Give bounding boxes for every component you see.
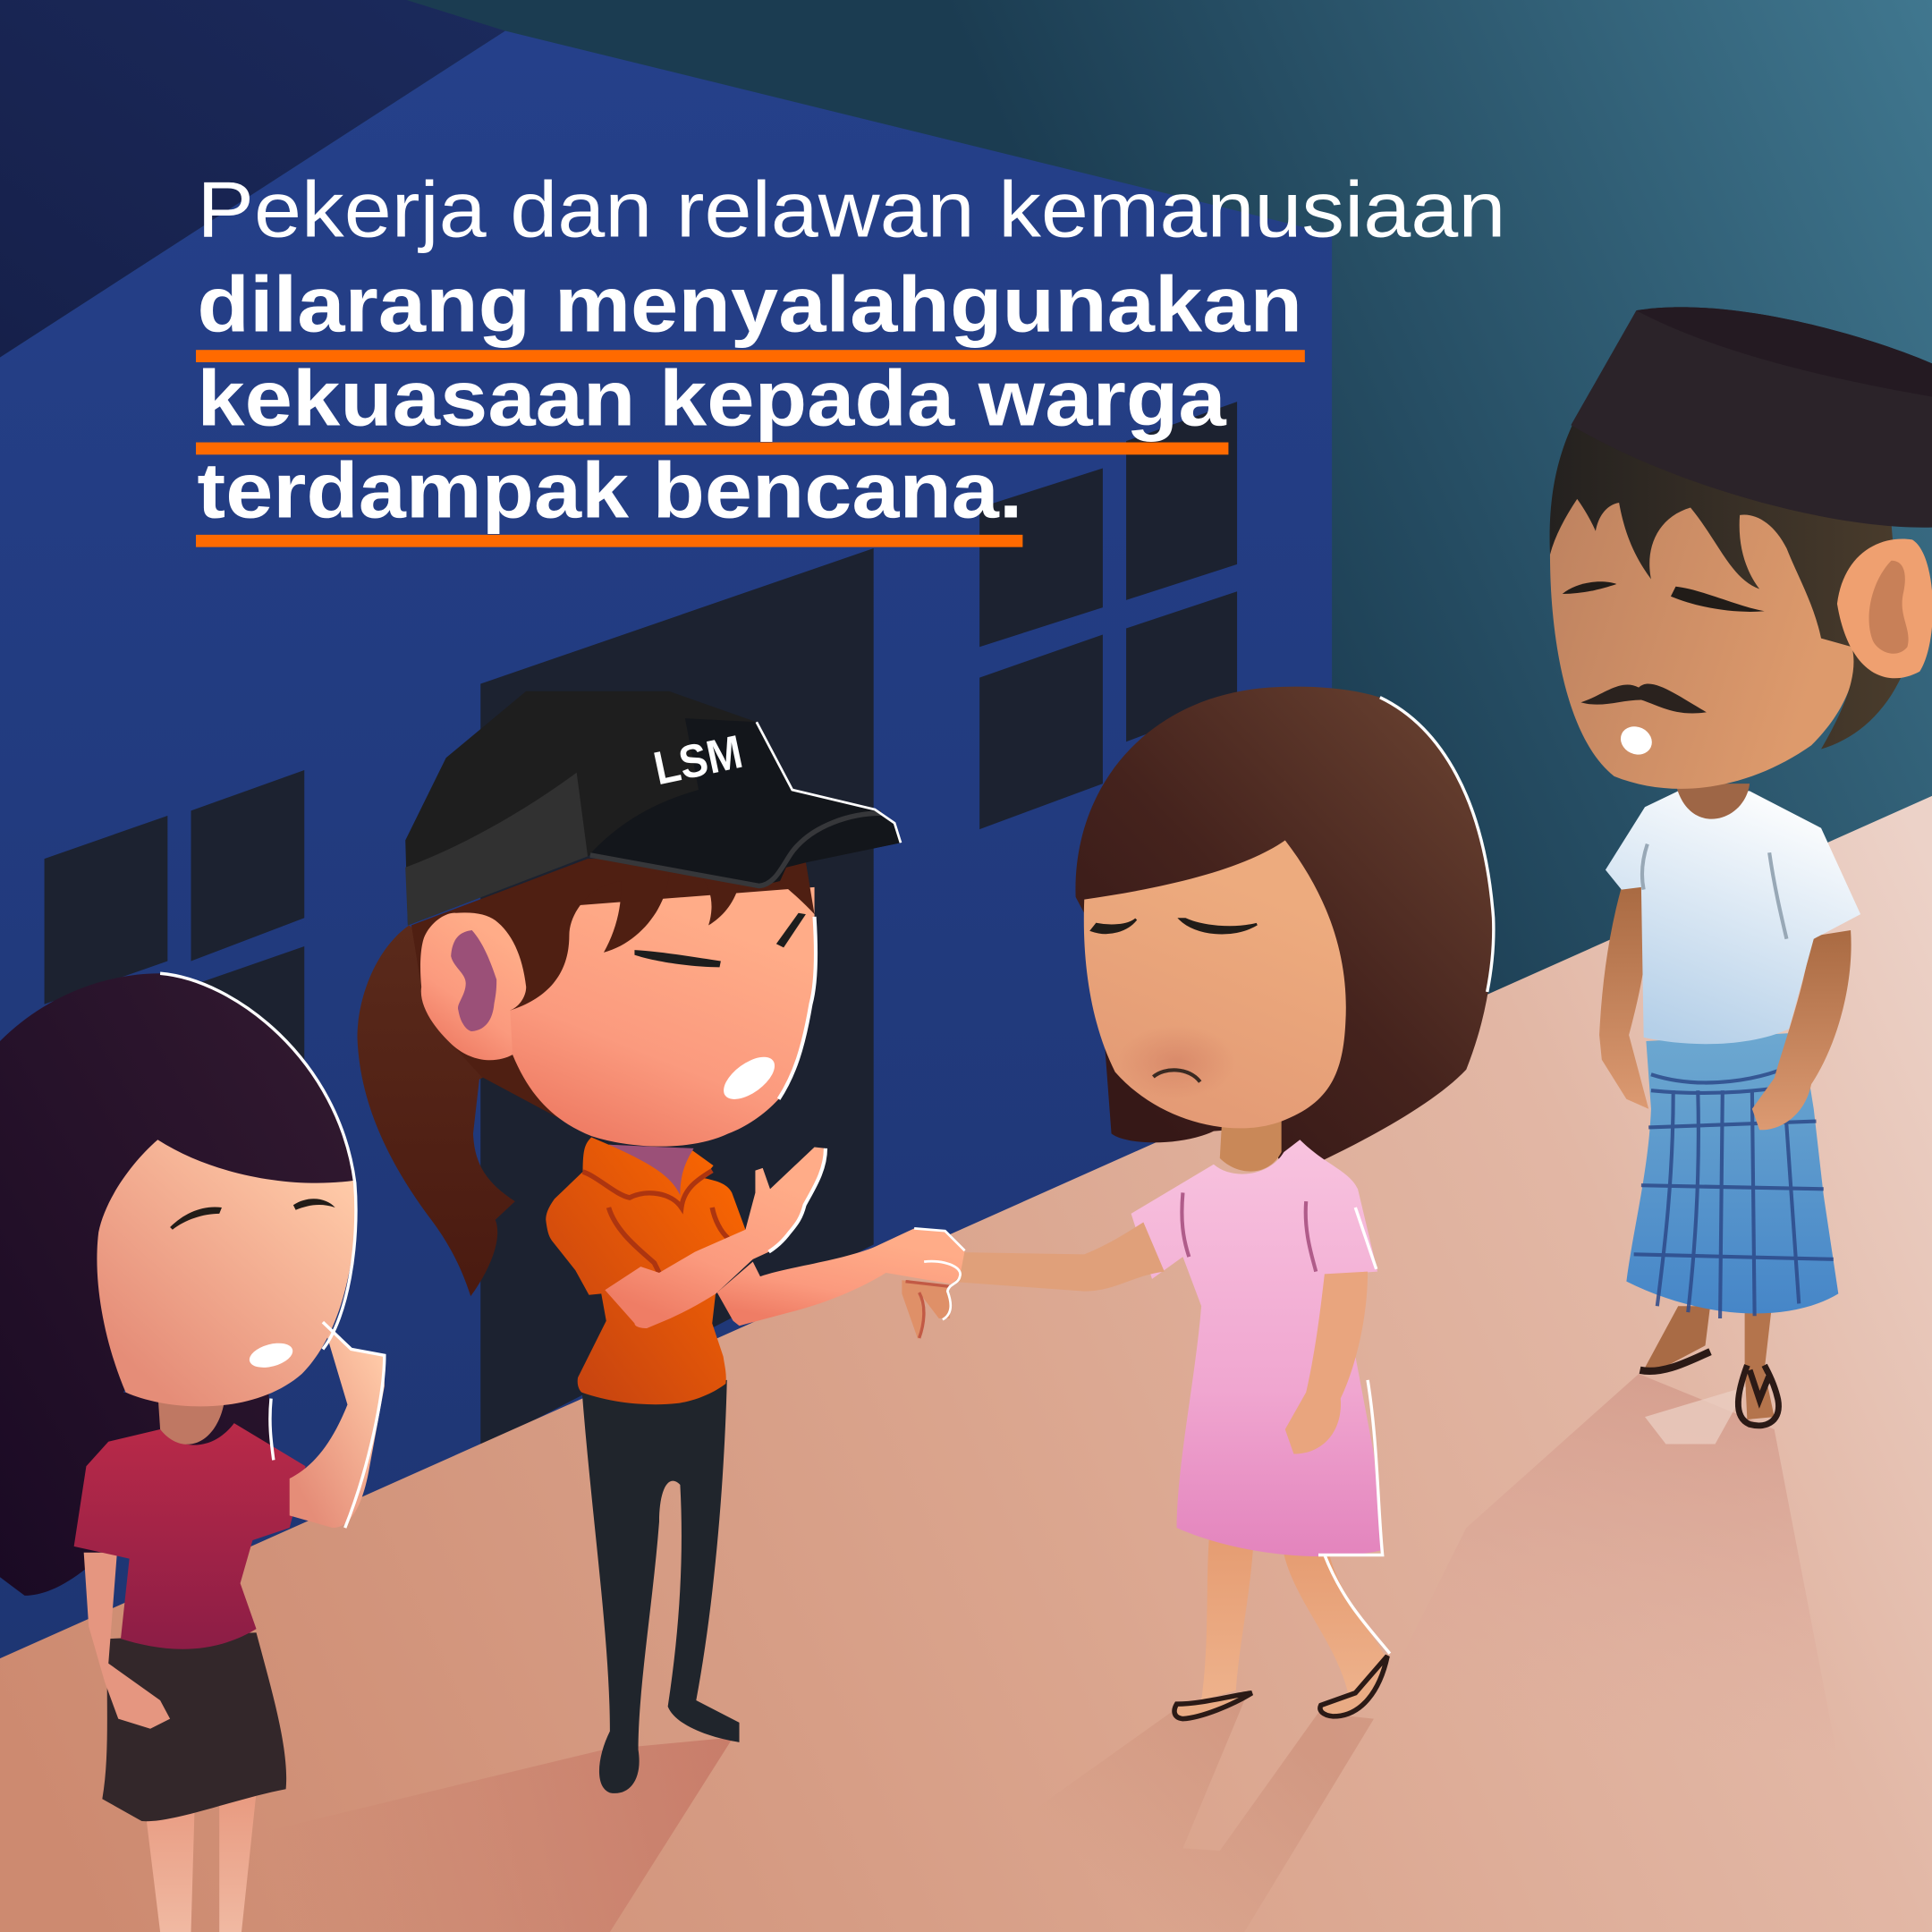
shirt xyxy=(546,1137,745,1404)
ear xyxy=(420,912,526,1060)
skirt xyxy=(102,1632,286,1821)
near arm and raised hand xyxy=(605,1147,826,1328)
shirt xyxy=(1606,791,1860,1044)
heading line 3: kekuasaan kepada warga xyxy=(197,353,1227,442)
hair xyxy=(1550,425,1903,750)
back hair xyxy=(1075,687,1494,1177)
facial features xyxy=(170,1199,335,1372)
neck xyxy=(1220,1115,1282,1172)
facial features xyxy=(634,913,806,1107)
facial features xyxy=(1092,919,1257,1081)
ground shadows xyxy=(123,1374,1836,1932)
face xyxy=(1084,840,1346,1128)
legs and sandals xyxy=(1174,1528,1387,1719)
white outline xyxy=(160,973,385,1528)
dress xyxy=(1131,1140,1383,1556)
outstretched arm xyxy=(936,1223,1165,1292)
facial features xyxy=(1563,581,1765,759)
building windows and door xyxy=(45,402,1237,1448)
heading line 1: Pekerja dan relawan kemanusiaan xyxy=(197,165,1505,253)
cap label: LSM xyxy=(649,726,747,795)
face xyxy=(1550,468,1860,789)
ponytail xyxy=(357,926,518,1296)
white outline xyxy=(1318,698,1494,1654)
face xyxy=(493,887,816,1147)
back hair xyxy=(411,859,815,1123)
character: woman in red xyxy=(0,973,385,1932)
ear xyxy=(1837,539,1932,678)
hair fringe xyxy=(411,859,815,1022)
legs xyxy=(146,1792,257,1932)
ground xyxy=(0,796,1932,1932)
character: NGO worker xyxy=(357,691,965,1793)
shirt xyxy=(74,1423,306,1649)
songkok cap xyxy=(1571,307,1932,528)
far arm and wrist xyxy=(717,1228,965,1326)
cap xyxy=(405,691,901,926)
heading text xyxy=(196,165,1505,547)
legs and sandals xyxy=(1640,1306,1778,1426)
heading line 4: terdampak bencana. xyxy=(197,446,1022,535)
face xyxy=(97,1140,356,1406)
legs xyxy=(581,1380,740,1793)
hanging fingers xyxy=(902,1280,950,1339)
character: man in sarong xyxy=(1550,307,1932,1426)
heading line 2: dilarang menyalahgunakan xyxy=(197,260,1302,349)
neck xyxy=(1675,784,1750,819)
character: woman in pink dress xyxy=(936,687,1494,1719)
raised arm and hand xyxy=(290,1322,385,1528)
arm near xyxy=(84,1553,170,1729)
arms xyxy=(1599,887,1649,1109)
white outline xyxy=(769,917,826,1252)
back hair xyxy=(0,973,355,1596)
near arm xyxy=(1285,1272,1368,1454)
sarong xyxy=(1626,1032,1838,1313)
neck xyxy=(157,1393,225,1445)
sarong stripes xyxy=(1634,1060,1834,1318)
building wall xyxy=(0,0,1332,1725)
